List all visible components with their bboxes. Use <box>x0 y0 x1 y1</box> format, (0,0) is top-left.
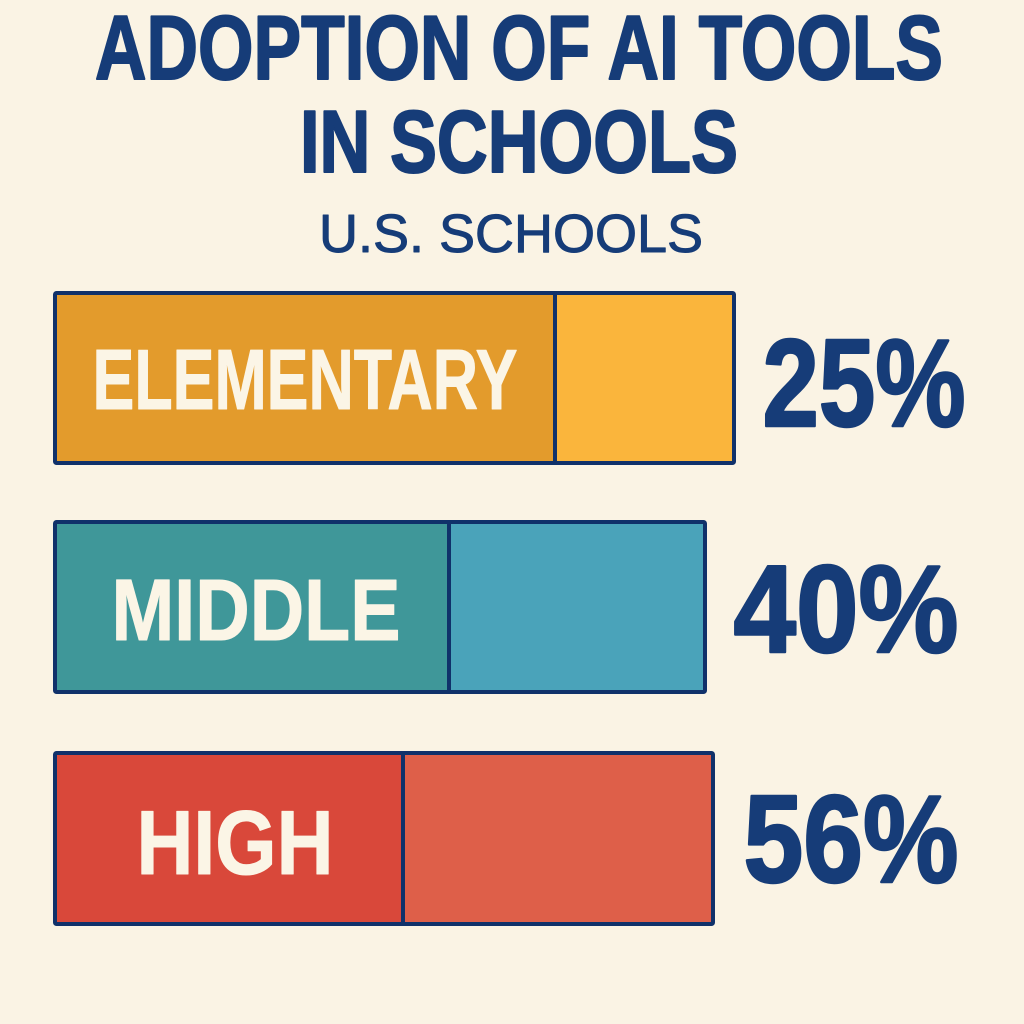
title: IN SCHOOLS <box>300 92 738 191</box>
bar: middle: MIDDLE <box>112 562 400 659</box>
value: 56%: 56% <box>744 771 958 909</box>
title <box>95 0 943 191</box>
value: 40%: 40% <box>734 541 958 679</box>
bar: high <box>55 753 713 924</box>
bar: elementary <box>55 293 734 463</box>
value: 25%: 25% <box>762 315 966 453</box>
bar: elementary: ELEMENTARY <box>92 333 518 428</box>
bar: middle <box>55 522 705 692</box>
subtitle: U.S. SCHOOLS <box>319 204 703 264</box>
bar: high: HIGH <box>136 793 334 894</box>
